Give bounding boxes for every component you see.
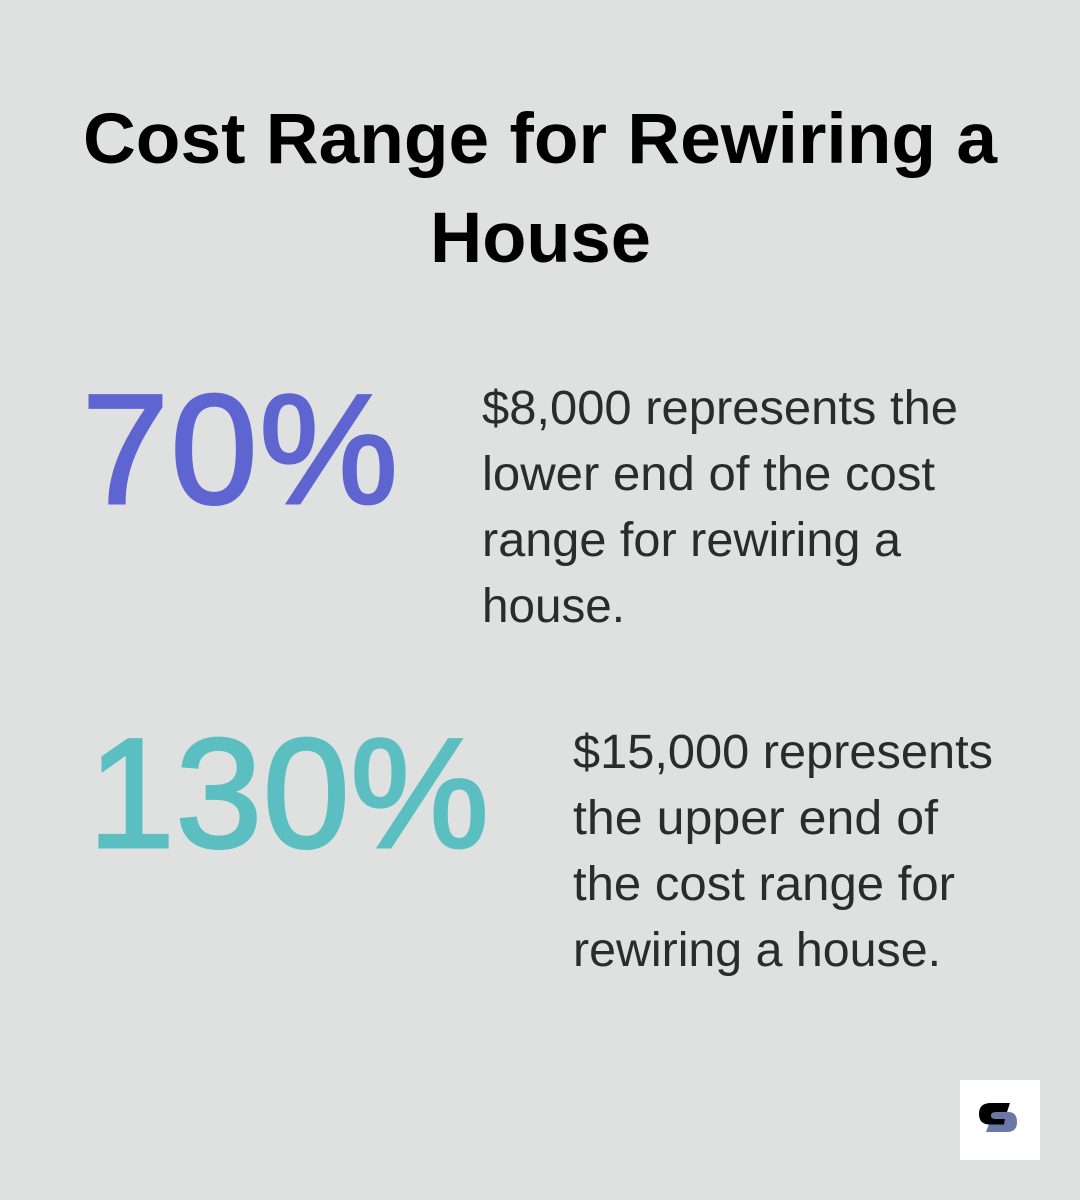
panel: lower cost stat — [82, 363, 958, 633]
panel: upper cost stat — [88, 707, 993, 977]
stat: 70%: 70% — [82, 363, 398, 537]
stat: 130%: 130% — [88, 707, 489, 881]
title — [83, 100, 998, 278]
text block: lower end description: $8,000 represents the — [482, 382, 958, 435]
text block: lower end description: range for rewiring a — [482, 514, 901, 567]
text block: lower end description: house. — [482, 580, 625, 633]
text block: upper end description: rewiring a house. — [573, 924, 941, 977]
title: House — [430, 199, 651, 278]
text block: upper end description: the upper end of — [573, 792, 939, 845]
text block: upper end description: $15,000 represents — [573, 726, 993, 779]
icon: logo badge — [960, 1080, 1040, 1160]
text block: upper end description — [573, 726, 993, 977]
text block: upper end description: the cost range for — [573, 858, 955, 911]
text block: lower end description: lower end of the cost — [482, 448, 935, 501]
text block: lower end description — [482, 382, 958, 633]
title: Cost Range for Rewiring a — [83, 100, 998, 179]
